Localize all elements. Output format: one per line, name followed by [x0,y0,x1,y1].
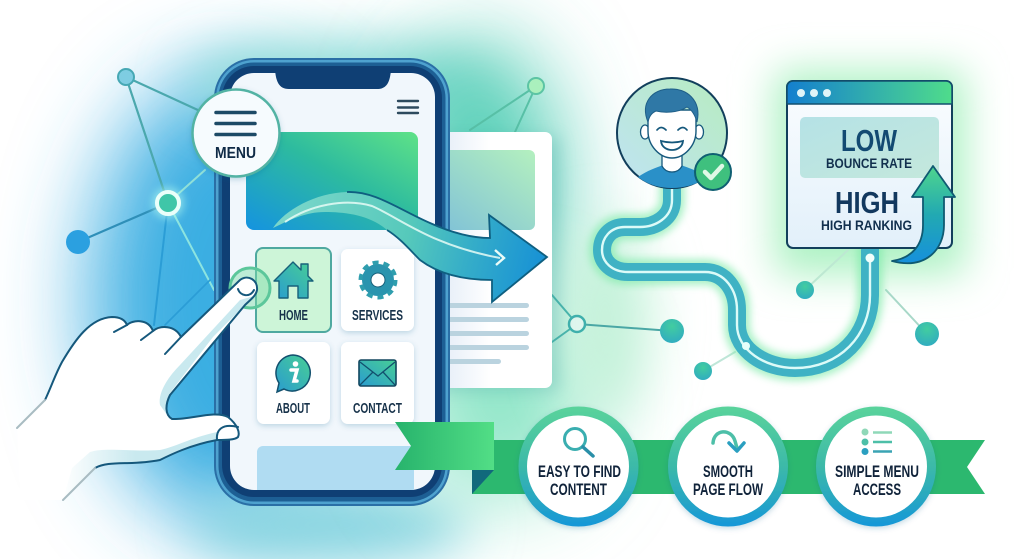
network nodes: right [470,78,939,380]
ranking up arrow [892,166,955,263]
avatar neck [662,152,682,172]
avatar hair [645,89,698,122]
tile: home [256,248,331,332]
phone screen [230,73,435,490]
badge: easy to find content: EASY TO FIND [538,463,621,481]
ribbon front flag [395,422,494,470]
phone [214,58,450,506]
page hero image [430,150,535,230]
hand shadow [63,296,254,500]
tile: services: SERVICES [352,308,403,324]
avatar ears [640,125,704,139]
tile: about: ABOUT [276,401,310,417]
panel: web page behind phone [430,132,560,392]
high ranking block: HIGH [835,185,899,220]
touch ripple [230,268,270,308]
low bounce rate panel: LOW [841,123,898,158]
badge: smooth page flow [668,406,788,526]
bottom content block [257,446,414,490]
badge: simple menu access [816,406,936,526]
menu badge: MENU [215,145,256,162]
hand outline [17,278,257,500]
avatar shoulders [638,165,707,188]
ribbon back band [472,440,985,494]
high ranking block [821,185,912,233]
check badge [695,154,731,190]
badge: easy to find content: CONTENT [550,481,607,499]
browser window [787,81,952,248]
tile: about [257,342,330,424]
badge: smooth page flow: SMOOTH [703,463,753,481]
badge: simple menu access: SIMPLE MENU [835,463,919,481]
menu badge [192,90,280,176]
ribbon fold [472,470,494,494]
ribbon banner [395,422,985,494]
tile: home: HOME [279,308,308,324]
hero banner [246,132,418,230]
user avatar [617,78,731,190]
icon: magnifier [564,428,593,456]
avatar face [648,110,696,158]
user journey path [602,186,874,368]
badge: simple menu access: ACCESS [853,481,901,499]
notch [275,70,391,89]
browser title bar [787,81,952,104]
low bounce rate panel: BOUNCE RATE [826,155,912,171]
tile: contact: CONTACT [353,401,402,417]
tile: contact [341,342,414,424]
icon: list [862,428,892,455]
avatar smile [657,128,687,130]
badge: smooth page flow: PAGE FLOW [693,481,763,499]
tile: services [341,249,414,331]
network nodes: left [66,69,214,325]
icon: curved arrow [713,432,744,451]
page text lines [440,303,529,364]
high ranking block: HIGH RANKING [821,217,912,233]
badge: easy to find content [518,406,638,526]
flow arrow [273,192,547,302]
hamburger icon [398,101,418,113]
hand pointing [17,278,257,500]
low bounce rate panel [800,117,939,178]
